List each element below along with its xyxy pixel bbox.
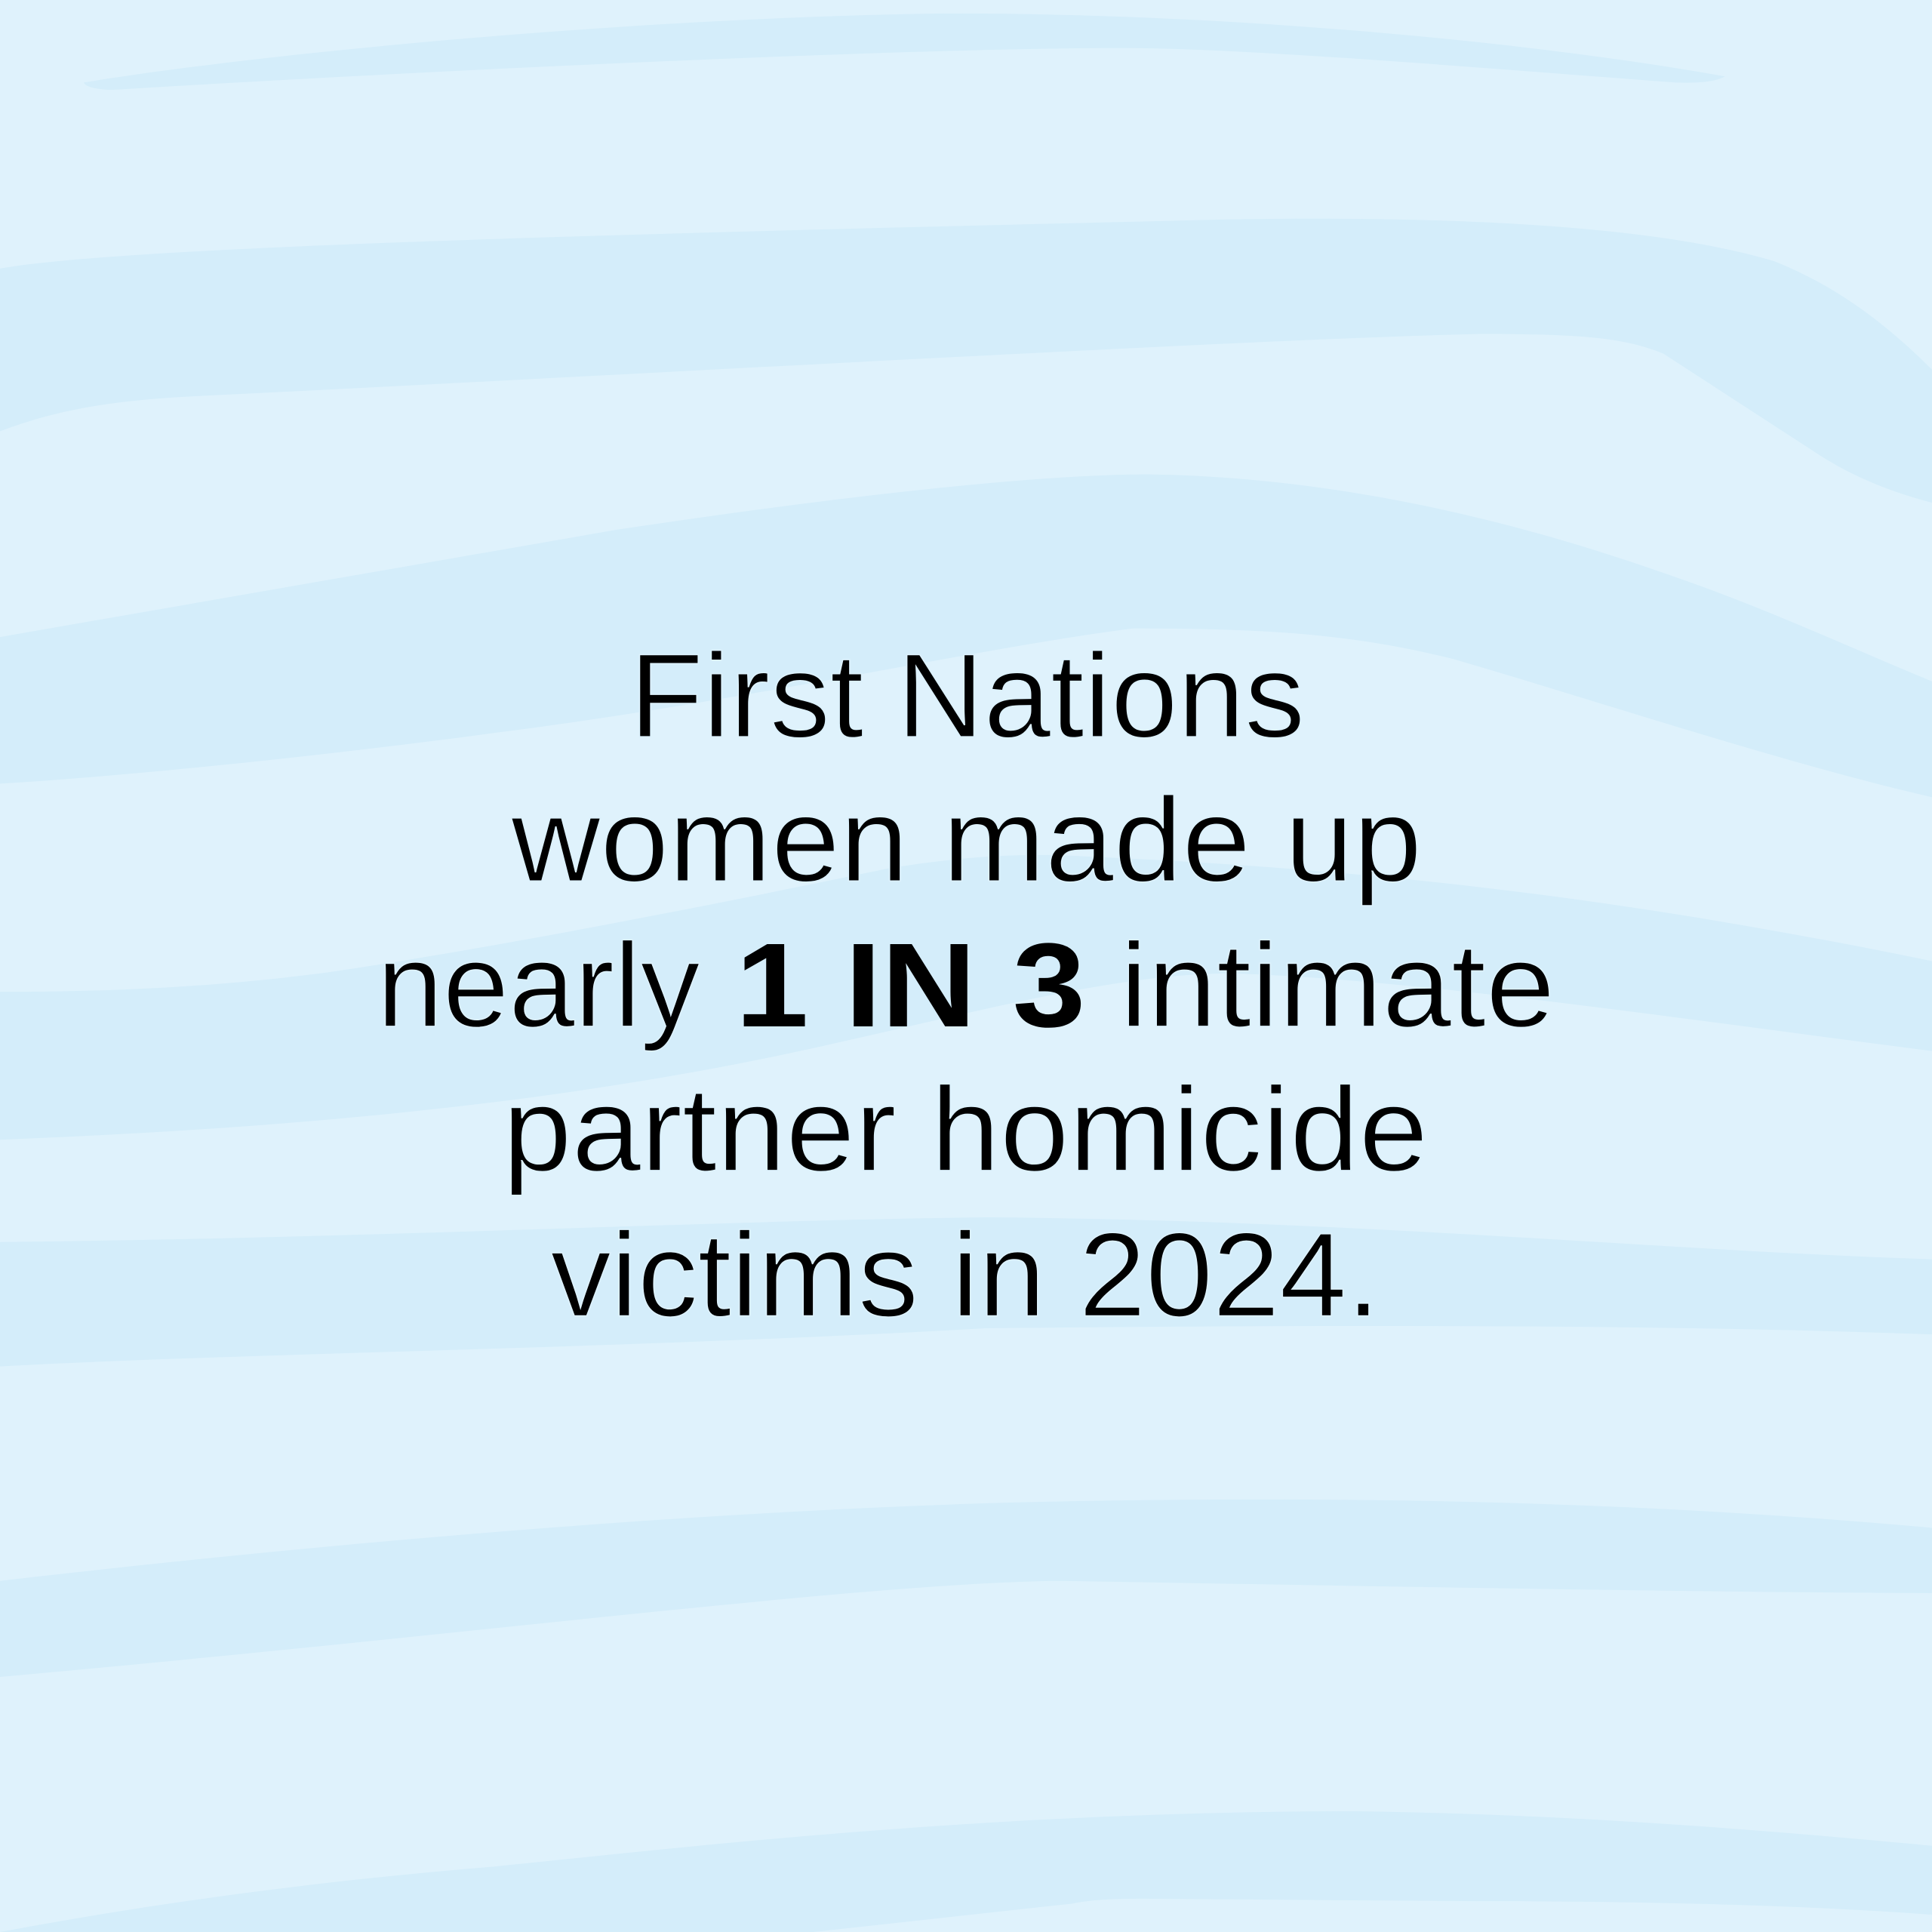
main statement text [377, 629, 1555, 1342]
main statement text: nearly [377, 918, 700, 1052]
main statement text: partner homicide [503, 1063, 1428, 1196]
main statement text: 1 IN 3 [736, 918, 1085, 1052]
main statement text: women made up [511, 773, 1422, 906]
main statement text: First Nations [629, 629, 1305, 762]
main statement text: victims in 2024. [551, 1208, 1380, 1342]
main statement text: intimate [1120, 918, 1555, 1052]
